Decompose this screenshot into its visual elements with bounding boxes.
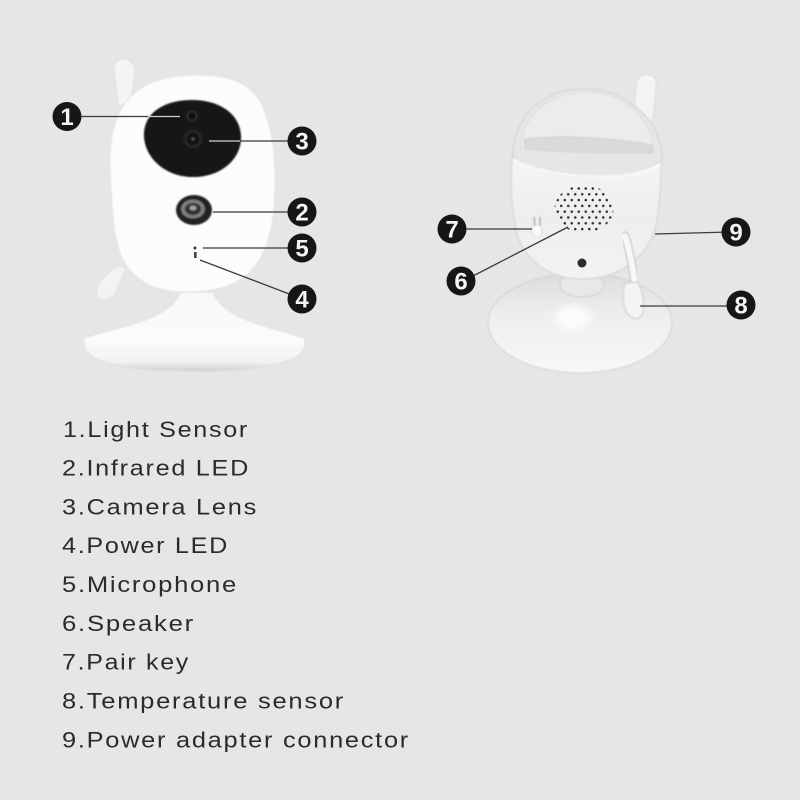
text: item 6: 6.Speaker: [62, 611, 195, 636]
icon: tripod hole: [578, 258, 586, 268]
icon: camera body: [110, 75, 275, 292]
panel: back view of camera: [488, 74, 672, 373]
callout 3: camera lens: [209, 126, 316, 156]
icon: camera lens: [183, 129, 203, 149]
panel: front view of camera: [84, 59, 305, 371]
icon: temperature sensor tip: [623, 282, 644, 318]
text: item 2: 2.Infrared LED: [62, 456, 250, 480]
callout 6: speaker: [446, 227, 568, 296]
callout 3: camera lens: 3: [295, 128, 309, 156]
callout 4: power LED: 4: [295, 286, 309, 314]
text: item 1: 1.Light Sensor: [63, 417, 249, 442]
text: item 8: 8.Temperature sensor: [62, 688, 345, 714]
text: item 3: 3.Camera Lens: [62, 494, 258, 520]
callout 9: power adapter connector: 9: [729, 220, 743, 246]
callout 4: power LED: [200, 260, 316, 314]
icon: back body lower: [511, 152, 661, 279]
callout 2: infrared LED: 2: [295, 200, 309, 226]
legend: numbered parts list: [62, 417, 410, 752]
callout 1: light sensor: 1: [60, 104, 74, 131]
icon: temperature sensor cable core: [625, 236, 635, 285]
icon: pair key: [532, 217, 542, 237]
callout 8: temperature sensor: 8: [734, 292, 748, 320]
callout 8: temperature sensor: [640, 290, 756, 320]
text: item 4: 4.Power LED: [62, 533, 229, 558]
icon: base highlight: [555, 305, 591, 331]
callout 7: pair key: 7: [445, 216, 459, 244]
text: item 9: 9.Power adapter connector: [62, 728, 410, 752]
icon: back slot: [524, 137, 653, 153]
icon: light sensor: [186, 110, 198, 122]
icon: lower band highlight: [514, 160, 660, 177]
icon: dark lens panel: [144, 100, 241, 177]
callout 5: microphone: [203, 234, 316, 262]
icon: stand base: [84, 292, 305, 371]
callout 1: light sensor: [52, 102, 180, 131]
icon: front antenna: [114, 59, 135, 108]
callout 7: pair key: [438, 214, 532, 244]
icon: back base: [488, 273, 672, 373]
callout 9: power adapter connector: [655, 218, 750, 246]
callout 6: speaker: 6: [454, 268, 468, 296]
icon: temperature sensor cable: [625, 236, 635, 285]
icon: infrared LED: [176, 195, 212, 225]
callout 5: microphone: 5: [295, 236, 309, 262]
text: item 5: 5.Microphone: [62, 572, 238, 597]
icon: speaker grille: [554, 185, 614, 233]
icon: neck: [560, 273, 604, 297]
callout 2: infrared LED: [213, 198, 316, 226]
icon: back dome: [513, 89, 662, 177]
icon: temperature sensor cable, front: [96, 266, 126, 300]
icon: power LED: [194, 252, 197, 258]
icon: microphone hole: [194, 246, 196, 250]
icon: back antenna: [634, 74, 656, 125]
text: item 7: 7.Pair key: [62, 650, 190, 674]
icon: inner dome: [521, 92, 654, 150]
